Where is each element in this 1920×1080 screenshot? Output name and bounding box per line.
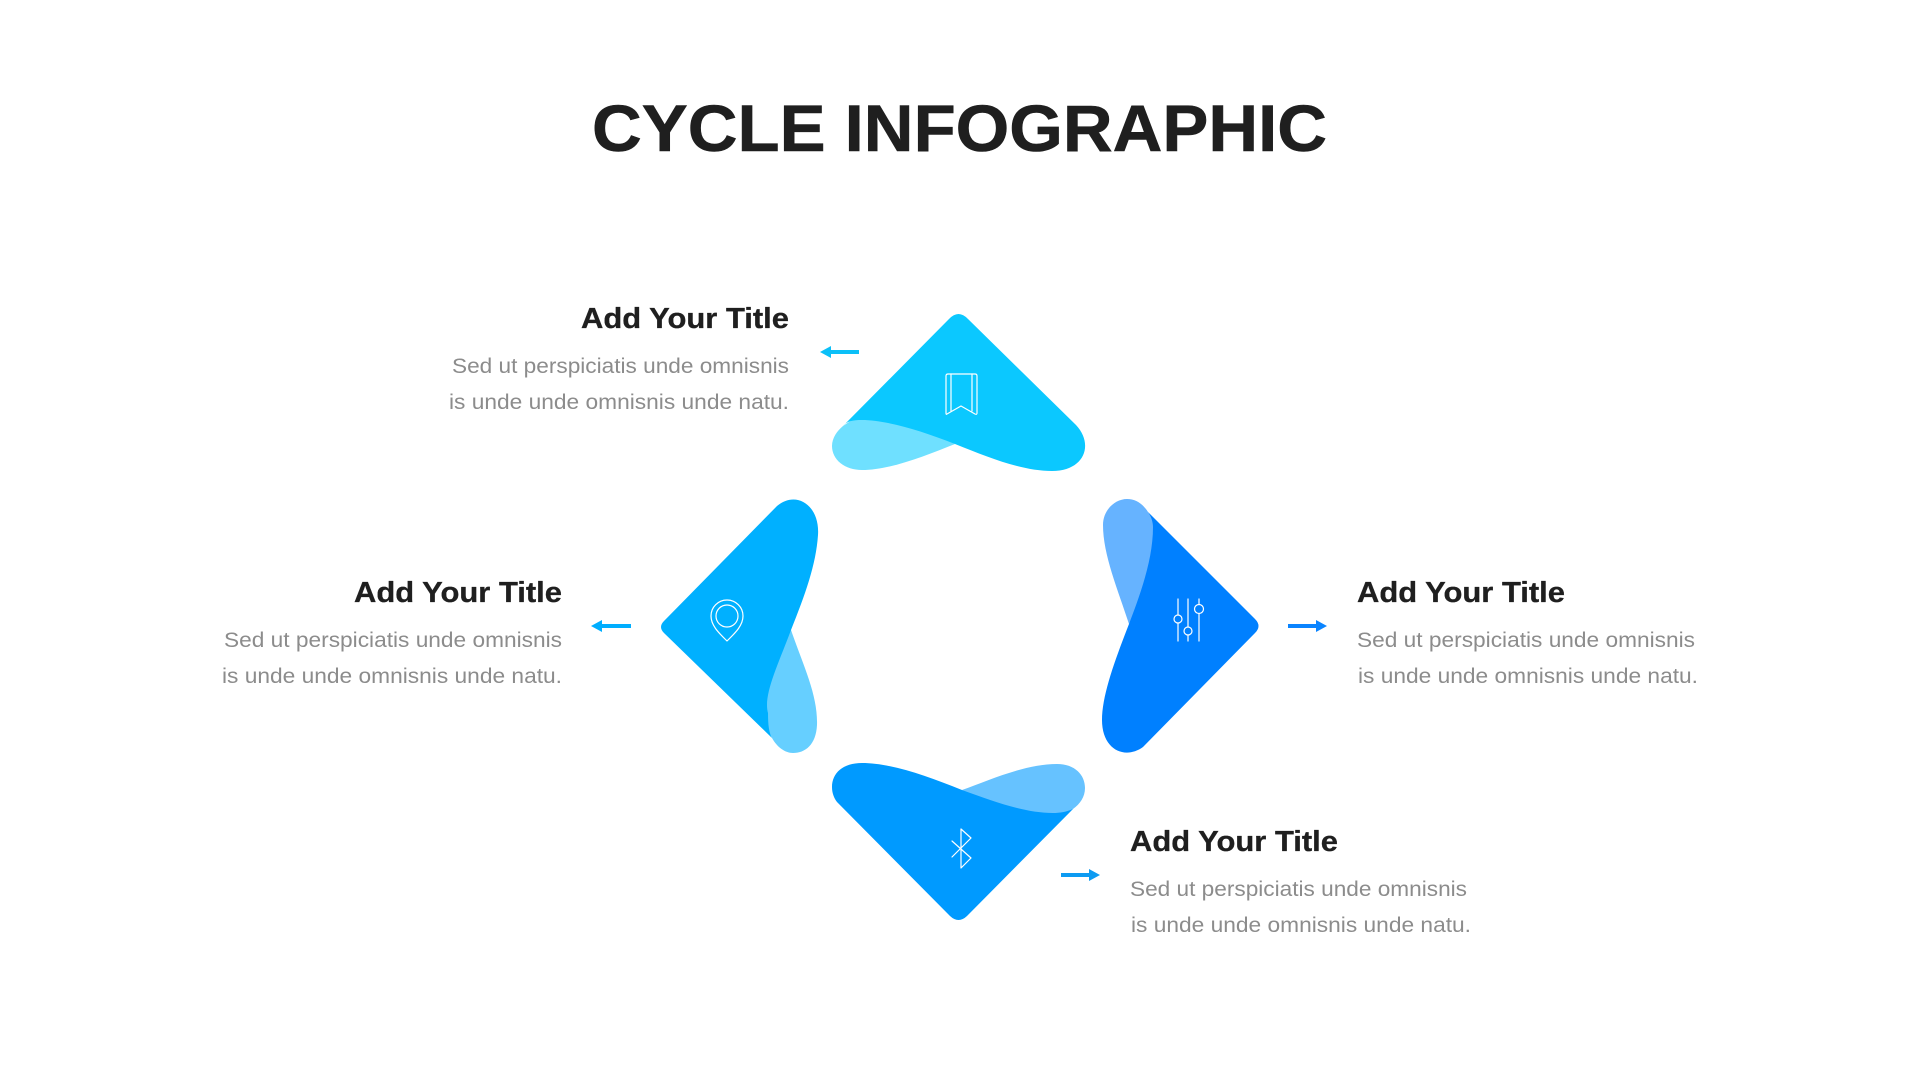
arrow: bottom right (1061, 869, 1100, 881)
text: top block: Sed ut perspiciatis unde omnisnis (452, 354, 789, 378)
text: left block: is unde unde omnisnis unde natu. (222, 664, 562, 688)
text: bottom block: is unde unde omnisnis unde natu. (1131, 913, 1471, 937)
text: left block (222, 577, 562, 688)
text: left block: Sed ut perspiciatis unde omnisnis (224, 628, 562, 652)
arrow: left (591, 620, 631, 632)
icon: bluetooth (952, 829, 971, 868)
text: top block: is unde unde omnisnis unde natu. (449, 390, 789, 414)
petal: left main shape (661, 499, 818, 738)
text: right block: Add Your Title (1357, 577, 1565, 609)
arrow: right (1288, 620, 1327, 632)
text: right block: is unde unde omnisnis unde natu. (1358, 664, 1698, 688)
panel: right segment (1102, 499, 1698, 753)
petal: bottom main shape (832, 763, 1073, 920)
icon: map pin (711, 600, 743, 641)
text: left block: Add Your Title (354, 577, 562, 609)
title: CYCLE INFOGRAPHIC (592, 91, 1327, 165)
petal: left light fold (760, 630, 817, 753)
icon: sliders (1174, 599, 1204, 641)
panel: bottom segment (832, 763, 1471, 937)
petal: top main shape (843, 314, 1085, 471)
text: bottom block (1130, 826, 1471, 937)
petal: right light fold (1103, 499, 1160, 624)
panel: top segment (449, 303, 1085, 471)
petal: right main shape (1102, 512, 1258, 753)
text: bottom block: Sed ut perspiciatis unde omnisnis (1130, 877, 1467, 901)
arrow: top left (820, 346, 859, 358)
text: bottom block: Add Your Title (1130, 826, 1338, 858)
icon: bookmark (946, 374, 977, 414)
text: right block: Sed ut perspiciatis unde omnisnis (1357, 628, 1695, 652)
text: top block (449, 303, 789, 414)
petal: bottom light fold (962, 764, 1085, 825)
petal: top light fold (832, 416, 955, 470)
text: right block (1357, 577, 1698, 688)
panel: left segment (222, 499, 818, 753)
text: top block: Add Your Title (581, 303, 789, 335)
